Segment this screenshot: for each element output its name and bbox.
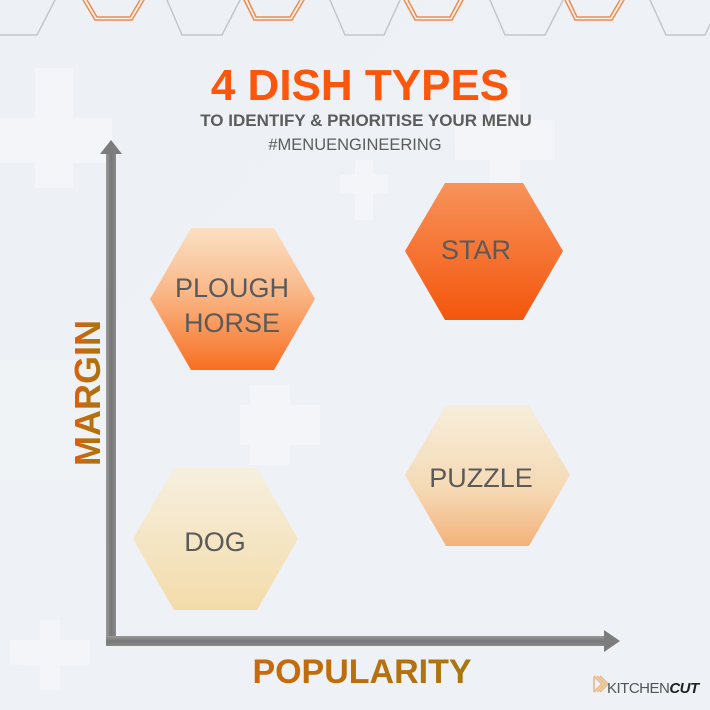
subtitle: TO IDENTIFY & PRIORITISE YOUR MENU xyxy=(200,111,532,130)
hexagon: plough horse: PLOUGH xyxy=(175,273,289,303)
vertical axis arrow xyxy=(100,140,122,646)
hexagon: puzzle: PUZZLE xyxy=(429,463,533,493)
hexagon: star: STAR xyxy=(441,235,511,265)
hexagon: dog: DOG xyxy=(184,527,246,557)
hashtag: #MENUENGINEERING xyxy=(268,136,442,154)
hexagon: star xyxy=(405,183,563,320)
logo: kitchencut xyxy=(594,676,701,697)
hexagon: plough horse xyxy=(150,228,315,370)
hexagon: dog xyxy=(133,468,298,610)
hexagon: puzzle xyxy=(405,405,570,546)
hexagon: plough horse: HORSE xyxy=(184,308,280,338)
logo: kitchencut: KITCHENCUT xyxy=(607,680,701,697)
top hexagon border xyxy=(0,0,710,35)
axis label: margin: MARGIN xyxy=(67,320,108,466)
axis label: popularity: POPULARITY xyxy=(252,653,472,691)
horizontal axis arrow xyxy=(106,630,620,652)
title: 4 DISH TYPES xyxy=(211,61,509,110)
